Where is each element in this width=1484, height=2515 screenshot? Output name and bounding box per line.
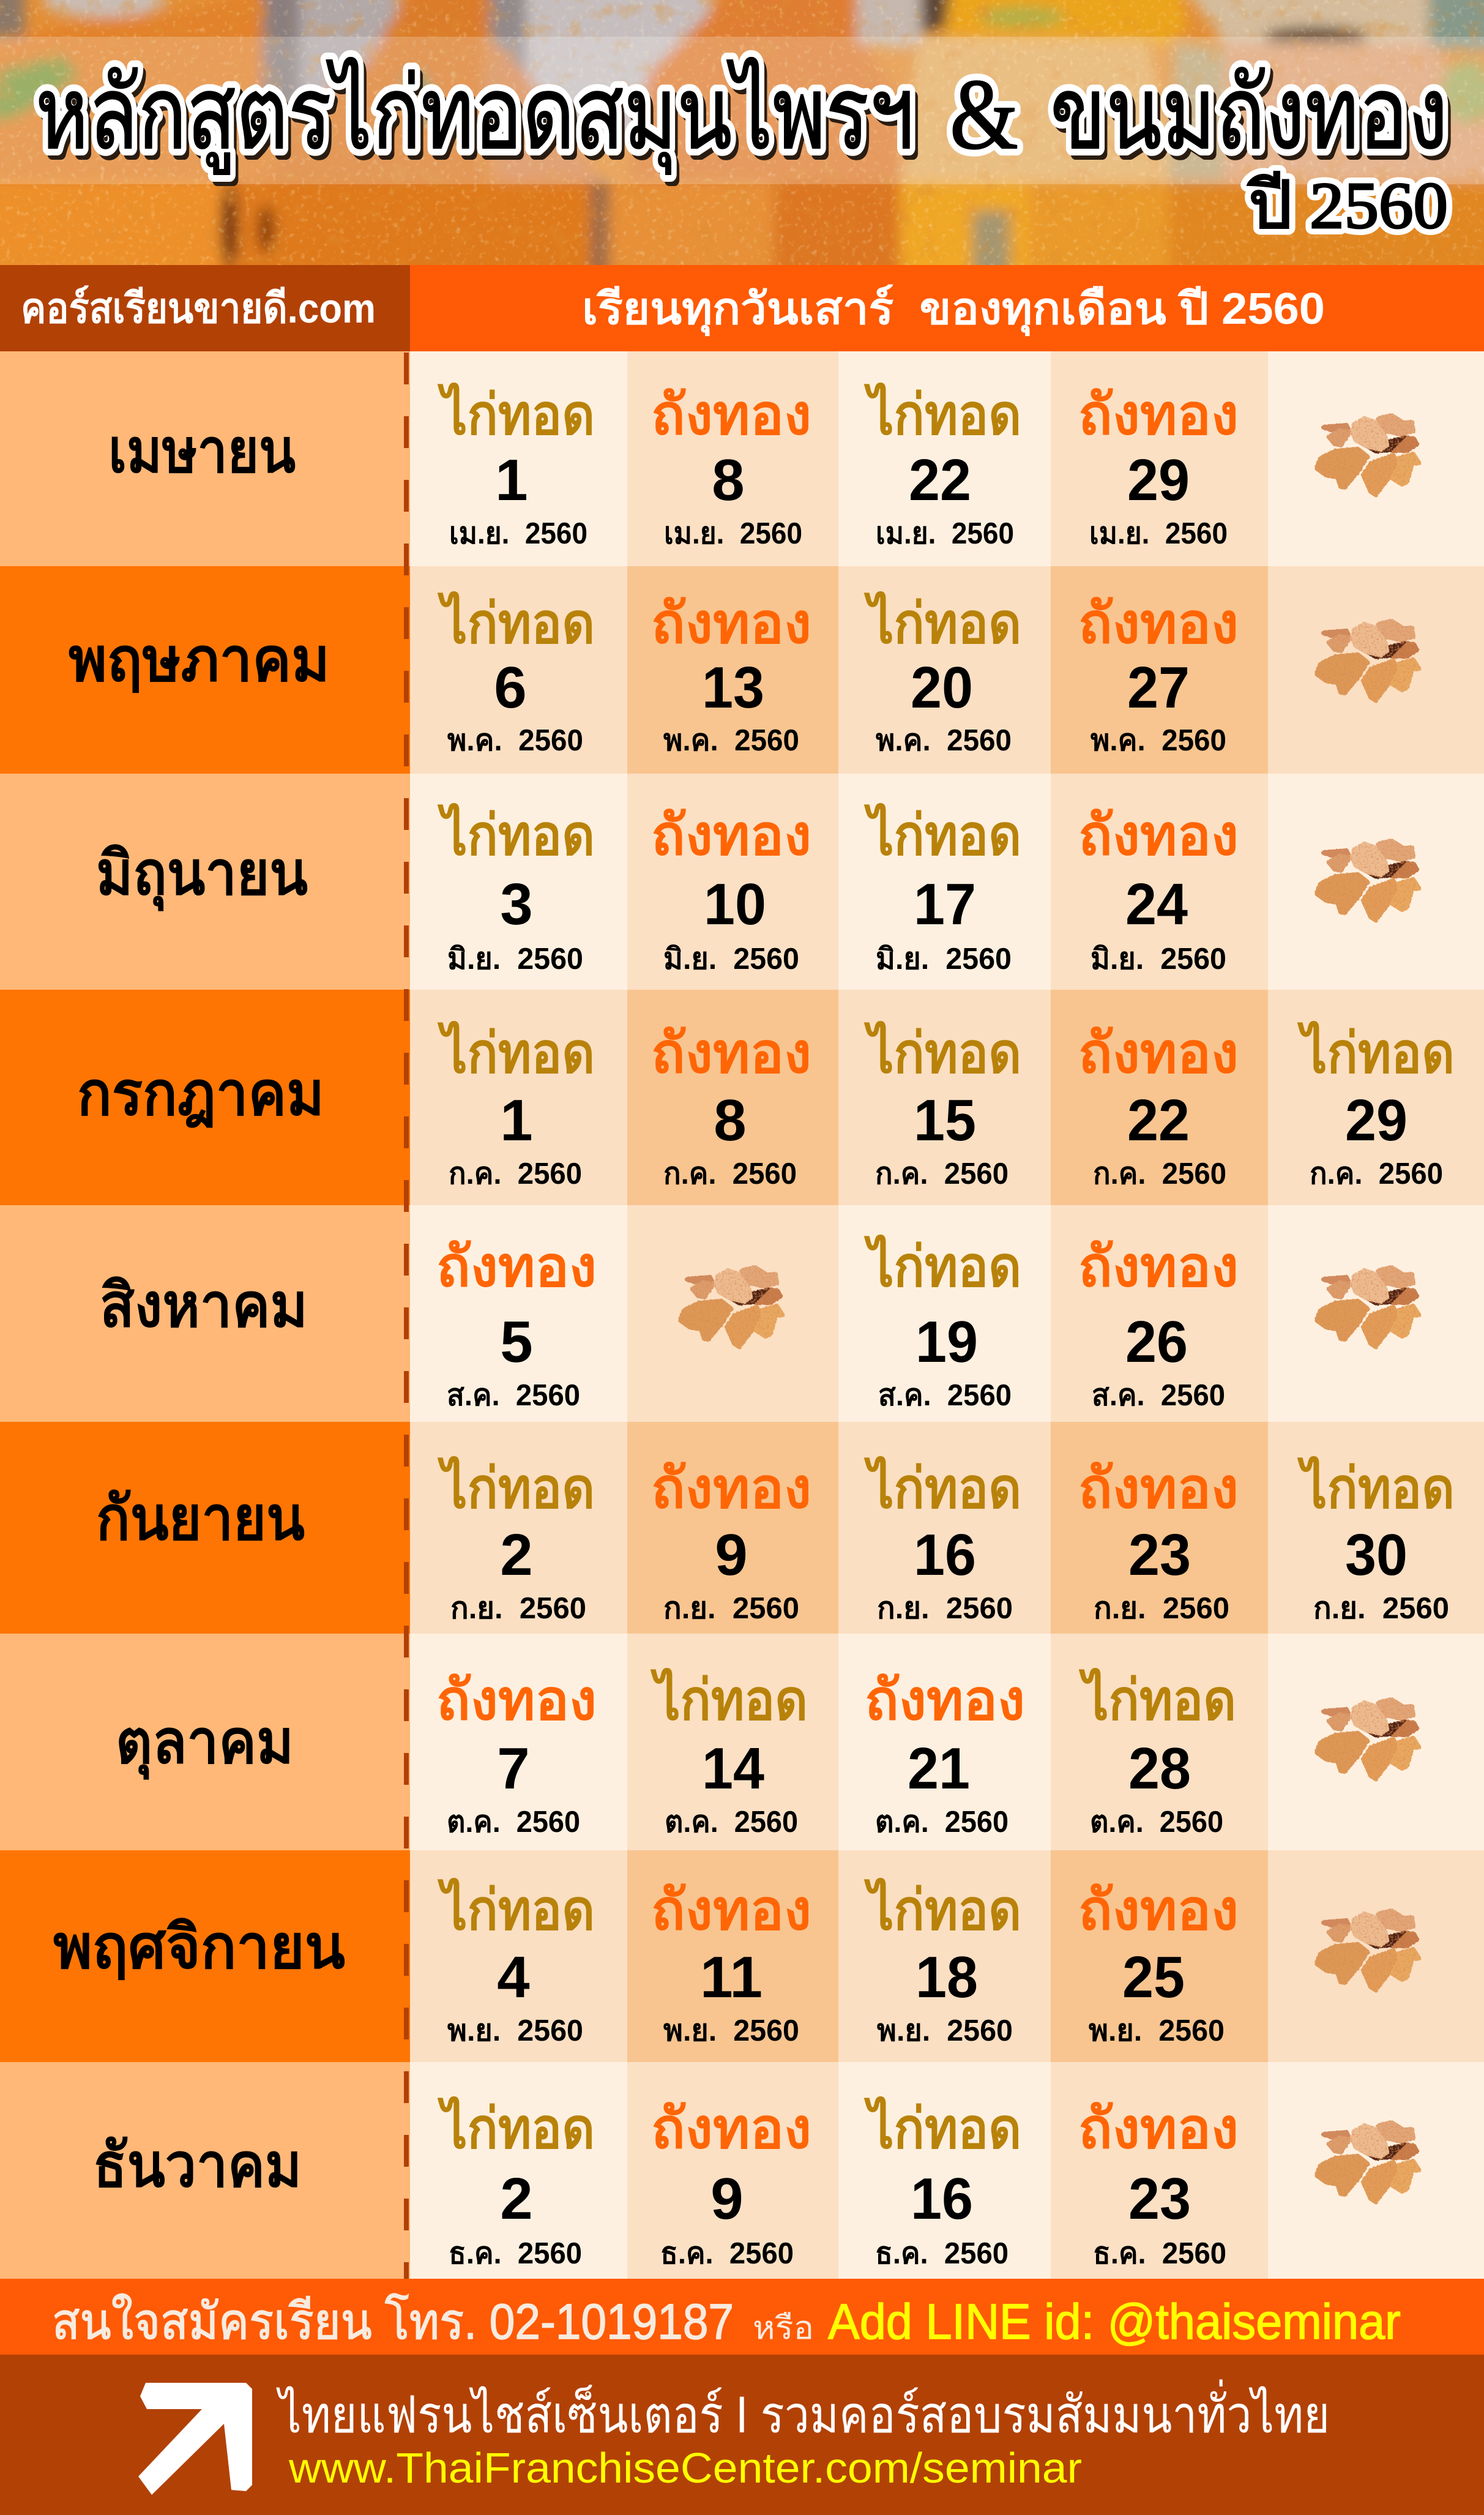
April cells: ถังทอง — [651, 384, 811, 446]
November cells: 4 — [497, 1945, 530, 2010]
August cells: ถังทอง — [436, 1236, 597, 1298]
December cells: ถังทอง — [1078, 2098, 1239, 2160]
September cells: ก.ย. 2560 — [877, 1592, 1013, 1625]
month: ธันวาคม: ธันวาคม — [93, 2131, 302, 2200]
August cells: ถังทอง — [1078, 1236, 1239, 1298]
icon: fried chicken April — [1317, 416, 1419, 495]
April cells: 29 — [1127, 447, 1190, 513]
May cells: 13 — [702, 655, 764, 720]
December cells: ไก่ทอด — [863, 2096, 1021, 2160]
October cells: 21 — [908, 1736, 970, 1801]
icon: fried chicken December — [1317, 2123, 1419, 2202]
title: หลักสูตรไก่ทอดสมุนไพรฯ — [35, 57, 914, 175]
icon: fried chicken November — [1317, 1911, 1419, 1990]
December cells: ถังทอง — [651, 2098, 811, 2160]
title year: ปี 2560 — [1247, 170, 1448, 242]
September cells: ไก่ทอด — [1297, 1456, 1455, 1520]
footer bar — [0, 2355, 1484, 2515]
month: ตุลาคม: ตุลาคม — [116, 1708, 294, 1780]
May cells: 6 — [494, 655, 527, 720]
September cells: 2 — [500, 1522, 533, 1588]
June cells: 10 — [704, 872, 766, 937]
June cells: มิ.ย. 2560 — [876, 943, 1012, 976]
June cells: ถังทอง — [651, 804, 811, 867]
May cells: ถังทอง — [651, 592, 811, 655]
September cells: ถังทอง — [651, 1457, 811, 1520]
July cells: 29 — [1345, 1088, 1408, 1153]
December cells: 23 — [1128, 2166, 1191, 2232]
October cells: ไก่ทอด — [1078, 1668, 1236, 1732]
December cells — [437, 2096, 1239, 2270]
November cells: พ.ย. 2560 — [1089, 2014, 1225, 2047]
August cells: ส.ค. 2560 — [878, 1379, 1012, 1412]
header bar: course site — [0, 265, 410, 351]
May cells: 27 — [1127, 655, 1190, 720]
July cells: ถังทอง — [651, 1022, 811, 1085]
June cells: ถังทอง — [1078, 804, 1239, 867]
June cells: ไก่ทอด — [863, 803, 1021, 867]
October cells: ต.ค. 2560 — [665, 1806, 798, 1839]
icon: arrow — [138, 2383, 252, 2495]
April cells: เม.ย. 2560 — [1089, 517, 1228, 550]
June cells: มิ.ย. 2560 — [663, 943, 799, 976]
September cells: ก.ย. 2560 — [1094, 1592, 1229, 1625]
icon: fried chicken June — [1317, 841, 1419, 920]
April cells: ถังทอง — [1078, 384, 1239, 446]
August cells: ส.ค. 2560 — [1092, 1379, 1225, 1412]
November cells: พ.ย. 2560 — [663, 2014, 799, 2047]
December cells: 9 — [710, 2166, 744, 2232]
header bar: course site: คอร์สเรียนขายดี.com — [21, 285, 376, 332]
September cells: 23 — [1128, 1522, 1191, 1588]
June cells — [437, 803, 1239, 976]
September cells: ไก่ทอด — [437, 1456, 595, 1520]
July cells: ก.ค. 2560 — [1310, 1157, 1443, 1190]
July cells: ก.ค. 2560 — [875, 1157, 1009, 1190]
contact bar — [0, 2279, 1484, 2355]
June cells: 17 — [914, 872, 976, 937]
December cells: ไก่ทอด — [437, 2096, 595, 2160]
November cells: ไก่ทอด — [437, 1878, 595, 1941]
July cells: 15 — [914, 1088, 976, 1153]
month: สิงหาคม: สิงหาคม — [100, 1271, 308, 1340]
September cells: ก.ย. 2560 — [663, 1592, 799, 1625]
month: พฤศจิกายน: พฤศจิกายน — [53, 1913, 345, 1981]
April cells: เม.ย. 2560 — [876, 517, 1014, 550]
May cells: พ.ค. 2560 — [447, 724, 583, 757]
contact bar: สนใจสมัครเรียน โทร. 02-1019187 — [52, 2294, 734, 2350]
April cells: เม.ย. 2560 — [664, 517, 802, 550]
April cells: 1 — [495, 447, 528, 513]
header translucent band — [0, 37, 1484, 184]
title year: ปี 2560 — [1247, 170, 1448, 242]
May cells: ถังทอง — [1078, 592, 1239, 655]
July cells: ก.ค. 2560 — [1093, 1157, 1226, 1190]
October cells: ต.ค. 2560 — [447, 1806, 580, 1839]
August cells — [436, 1235, 1239, 1412]
icon: fried chicken May — [1317, 621, 1419, 700]
December cells: 16 — [911, 2166, 973, 2232]
June cells: มิ.ย. 2560 — [1091, 943, 1226, 976]
April cells: ไก่ทอด — [863, 383, 1021, 446]
December cells: ธ.ค. 2560 — [1093, 2237, 1226, 2270]
July cells — [437, 1021, 1455, 1190]
October cells: ถังทอง — [865, 1669, 1025, 1732]
December cells: 2 — [500, 2166, 533, 2232]
October cells: 14 — [702, 1736, 764, 1801]
May cells: ไก่ทอด — [863, 591, 1021, 655]
July cells: 1 — [500, 1088, 533, 1153]
June cells: มิ.ย. 2560 — [447, 943, 583, 976]
July cells: ไก่ทอด — [437, 1021, 595, 1085]
December cells: ธ.ค. 2560 — [449, 2237, 582, 2270]
October cells: ถังทอง — [436, 1669, 597, 1732]
April cells: ไก่ทอด — [437, 383, 595, 446]
September cells: 30 — [1345, 1522, 1408, 1588]
November cells: 25 — [1122, 1945, 1185, 2010]
May cells — [437, 591, 1239, 757]
August cells: 26 — [1125, 1309, 1188, 1375]
title: & — [950, 58, 1018, 170]
month: เมษายน: เมษายน — [108, 417, 296, 485]
December cells: ธ.ค. 2560 — [660, 2237, 794, 2270]
November cells: ถังทอง — [1078, 1879, 1239, 1941]
contact bar: หรือ — [753, 2311, 814, 2346]
May cells: พ.ค. 2560 — [663, 724, 799, 757]
September cells: ก.ย. 2560 — [450, 1592, 586, 1625]
November cells: 18 — [915, 1945, 978, 2010]
September cells: ก.ย. 2560 — [1313, 1592, 1449, 1625]
May cells: พ.ค. 2560 — [1091, 724, 1226, 757]
August cells: ไก่ทอด — [863, 1235, 1021, 1298]
month: กันยายน: กันยายน — [96, 1484, 305, 1553]
April cells: 8 — [712, 447, 745, 513]
September cells: ไก่ทอด — [863, 1456, 1021, 1520]
October cells: 7 — [497, 1736, 530, 1801]
icon: fried chicken August col 2 — [680, 1268, 782, 1347]
November cells: พ.ย. 2560 — [447, 2014, 583, 2047]
footer url: www.ThaiFranchiseCenter.com/seminar — [288, 2444, 1082, 2492]
July cells: ก.ค. 2560 — [449, 1157, 582, 1190]
July cells: ถังทอง — [1078, 1022, 1239, 1085]
April cells — [437, 383, 1239, 550]
August cells: 5 — [500, 1309, 533, 1375]
May cells: ไก่ทอด — [437, 591, 595, 655]
November cells: ถังทอง — [651, 1879, 811, 1941]
October cells — [436, 1668, 1236, 1839]
icon: fried chicken August col 5 — [1317, 1268, 1419, 1347]
September cells — [437, 1456, 1455, 1625]
September cells: 16 — [914, 1522, 976, 1588]
footer title: ไทยแฟรนไชส์เซ็นเตอร์ I รวมคอร์สอบรมสัมมนาทั่วไทย — [276, 2379, 1330, 2443]
icon: fried chicken October — [1317, 1700, 1419, 1779]
June cells: ไก่ทอด — [437, 803, 595, 867]
July cells: ไก่ทอด — [1297, 1021, 1455, 1085]
title: หลักสูตรไก่ทอดสมุนไพรฯ — [39, 62, 918, 181]
November cells — [437, 1878, 1239, 2047]
October cells: ต.ค. 2560 — [1090, 1806, 1223, 1839]
title: หลักสูตรไก่ทอดสมุนไพรฯ — [35, 57, 914, 175]
title: & — [950, 58, 1018, 170]
April cells: เม.ย. 2560 — [449, 517, 587, 550]
month: มิถุนายน: มิถุนายน — [96, 839, 308, 911]
May cells: พ.ค. 2560 — [876, 724, 1012, 757]
June cells: 3 — [500, 872, 533, 937]
header bar: schedule — [410, 265, 1484, 351]
May cells: 20 — [911, 655, 973, 720]
September cells: 9 — [715, 1522, 748, 1588]
November cells: 11 — [700, 1945, 763, 2010]
August cells: 19 — [915, 1309, 978, 1375]
month: พฤษภาคม: พฤษภาคม — [69, 626, 330, 694]
panel: schedule grid backgrounds — [0, 351, 1484, 2279]
October cells: ไก่ทอด — [650, 1668, 808, 1732]
July cells: 22 — [1127, 1088, 1190, 1153]
contact bar: Add LINE id: @thaiseminar — [828, 2294, 1401, 2350]
July cells: 8 — [714, 1088, 747, 1153]
December cells: ธ.ค. 2560 — [875, 2237, 1009, 2270]
month: กรกฎาคม: กรกฎาคม — [77, 1059, 324, 1129]
October cells: ต.ค. 2560 — [875, 1806, 1009, 1839]
September cells: ถังทอง — [1078, 1457, 1239, 1520]
July cells: ไก่ทอด — [863, 1021, 1021, 1085]
header photo: fried chicken background — [0, 0, 1484, 285]
October cells: 28 — [1128, 1736, 1191, 1801]
July cells: ก.ค. 2560 — [663, 1157, 797, 1190]
August cells: ส.ค. 2560 — [447, 1379, 580, 1412]
April cells: 22 — [909, 447, 971, 513]
November cells: ไก่ทอด — [863, 1878, 1021, 1941]
header bar: schedule: เรียนทุกวันเสาร์ ของทุกเดือน ปี 2560 — [582, 284, 1325, 337]
November cells: พ.ย. 2560 — [877, 2014, 1013, 2047]
June cells: 24 — [1125, 872, 1188, 937]
